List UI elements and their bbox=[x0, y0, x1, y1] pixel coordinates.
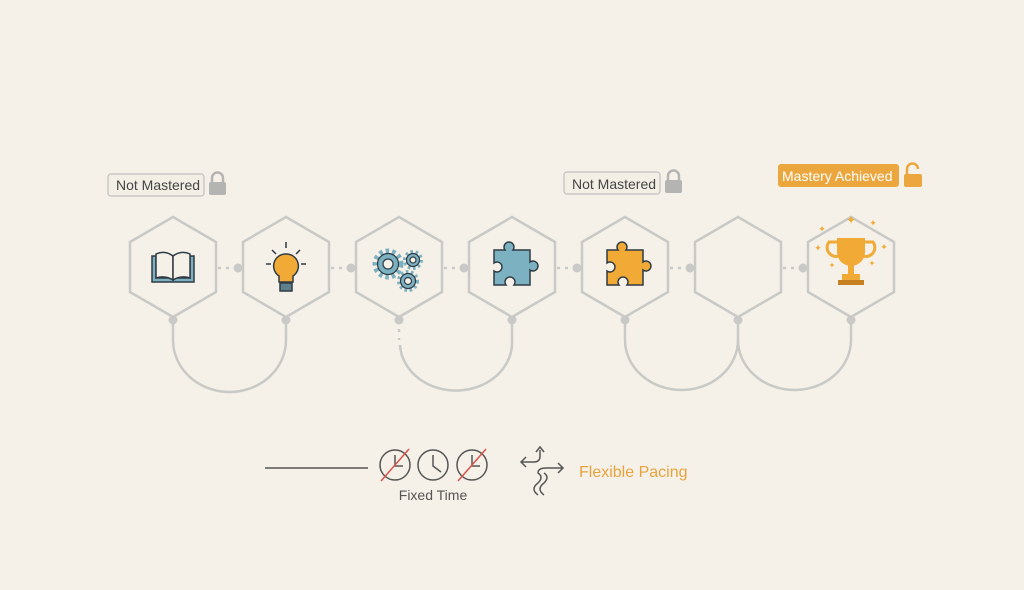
icon: trophy: ✦ bbox=[880, 242, 888, 252]
label: Not Mastered 1 bbox=[108, 172, 226, 196]
label: Mastery Achieved bbox=[778, 164, 922, 187]
fixed time legend: Fixed Time bbox=[399, 487, 467, 503]
icon: trophy: ✦ bbox=[829, 261, 836, 270]
label: Not Mastered 1: Not Mastered bbox=[116, 177, 200, 193]
connectors: dotted horizontal links bbox=[218, 264, 808, 272]
icon: trophy: ✦ bbox=[869, 218, 877, 228]
icon: book bbox=[152, 252, 194, 282]
connectors: bottom arcs bbox=[168, 316, 856, 392]
icon: gears bbox=[375, 251, 421, 290]
icon: trophy: ✦ bbox=[846, 213, 856, 227]
flexible pacing legend bbox=[521, 447, 688, 495]
icon: blue puzzle bbox=[494, 242, 538, 285]
label: Not Mastered 2 bbox=[564, 170, 682, 194]
icon: trophy: ✦ bbox=[818, 224, 826, 234]
label: Mastery Achieved: Mastery Achieved bbox=[782, 168, 892, 184]
icon: light bulb bbox=[266, 242, 306, 291]
icon: trophy bbox=[814, 213, 888, 285]
icon: orange puzzle bbox=[607, 242, 651, 285]
flexible pacing legend: Flexible Pacing bbox=[579, 464, 688, 481]
icon: trophy: ✦ bbox=[869, 259, 876, 268]
fixed time legend bbox=[265, 449, 487, 503]
hexagons bbox=[130, 217, 894, 317]
icon: trophy: ✦ bbox=[814, 243, 822, 253]
label: Not Mastered 2: Not Mastered bbox=[572, 176, 656, 192]
